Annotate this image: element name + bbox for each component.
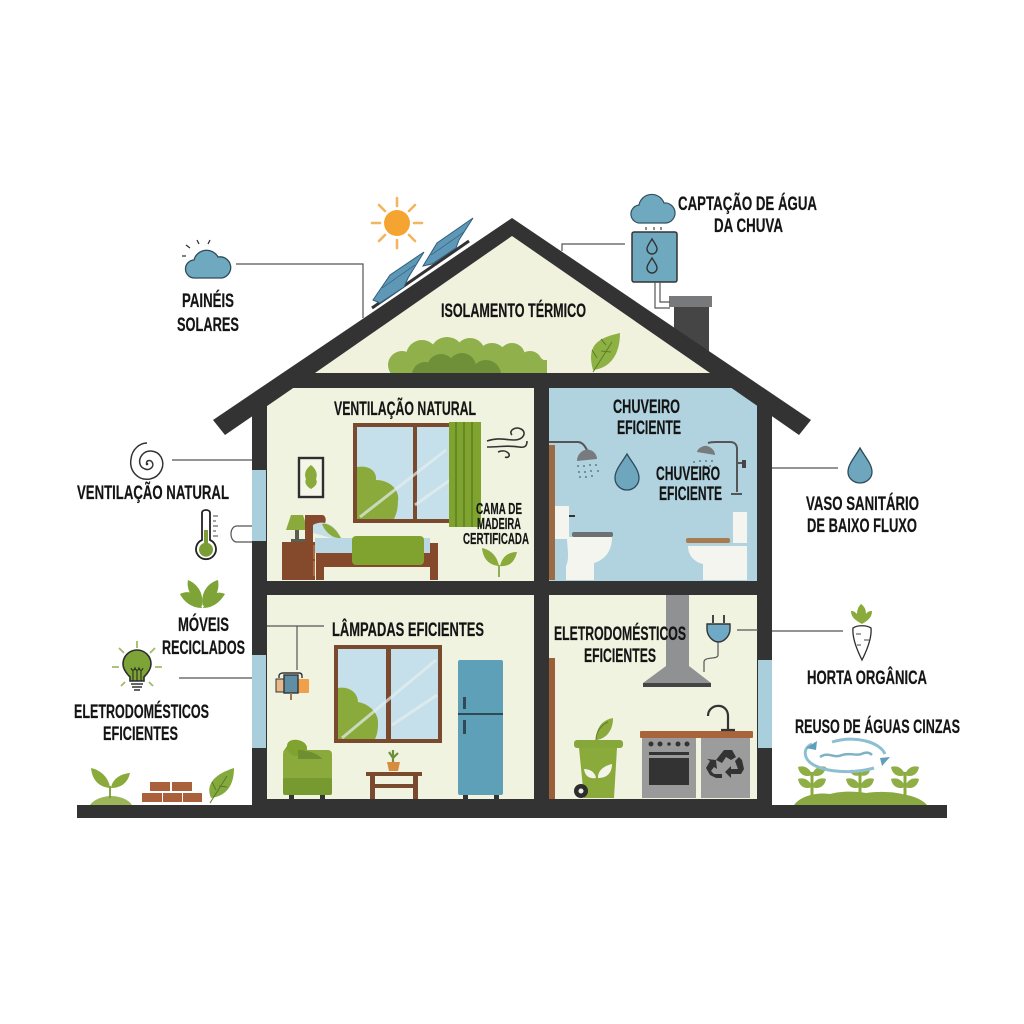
icon: cloud weather [182,240,231,278]
panel: kitchen [549,595,758,799]
icon: wind [487,428,527,457]
label: painéis solares [177,290,239,336]
heading: eletrodomésticos eficientes: ELETRODOMÉSTICOS [554,623,686,645]
leader: rain collection [562,244,625,251]
label: móveis reciclados: RECICLADOS [162,638,245,659]
leader: horta [772,630,843,632]
label: horta orgânica: HORTA ORGÂNICA [807,667,927,689]
label: captação de água: CAPTAÇÃO DE ÁGUA [678,193,817,215]
stove [642,738,696,798]
icon: light bulb [112,641,162,690]
middle floor [260,581,765,595]
heading: eletrodomésticos eficientes: EFICIENTES [584,646,656,667]
fridge [458,660,503,799]
attic floor beam [267,373,758,405]
label: cama de madeira certificada: CERTIFICADA [463,531,529,548]
label: ventilação natural: VENTILAÇÃO NATURAL [77,482,229,504]
icon: spiral air [131,443,163,479]
icon: attic leaf [591,333,620,372]
toilet left [555,506,613,580]
sustainable house infographic [74,192,960,818]
label: chuveiro eficiente: CHUVEIRO [656,464,720,485]
icon: water drop right [848,448,872,483]
label: chuveiro eficiente [656,464,722,505]
heading: chuveiro eficiente [613,397,681,439]
coffee table with plant [366,750,422,799]
icon: sun [372,198,422,248]
panel: living room [267,619,503,799]
icon: seedling left [90,768,132,805]
shower right [692,442,746,494]
house structure [77,218,947,818]
sofa [283,740,332,799]
label: vaso sanitário: DE BAIXO FLUXO [807,516,917,537]
label: cama de madeira certificada: CAMA DE [476,501,522,518]
icon: plug [704,615,730,672]
toilet right [686,512,747,580]
label: eletrodomésticos eficientes: EFICIENTES [103,724,178,745]
label: móveis reciclados [162,614,245,659]
heading: lâmpadas eficientes: LÂMPADAS EFICIENTES [332,619,484,641]
label: cama de madeira certificada [463,501,529,548]
leader: bulb [179,677,252,679]
wall window lower left [252,655,266,748]
room: bathroom background [549,388,757,581]
attic insulation bush [388,337,547,373]
leader: ventilação [172,459,252,461]
label: painéis solares: SOLARES [177,315,239,336]
roof [213,218,811,435]
label: chuveiro eficiente: EFICIENTE [659,484,722,505]
panel: bedroom [282,398,529,580]
heading: eletrodomésticos eficientes [554,623,686,667]
label: cama de madeira certificada: MADEIRA [477,516,521,533]
recycling cabinet [701,738,750,798]
wall window right [758,660,772,748]
label: eletrodomésticos eficientes: ELETRODOMÉSTICOS [74,701,209,723]
leader: vaso sanitário [772,467,838,469]
heading: chuveiro eficiente: EFICIENTE [617,418,681,439]
leader: thermometer [231,526,252,542]
compost bin [574,718,623,798]
room: living room background [267,595,534,799]
window [334,645,442,743]
picture frame [299,458,323,497]
window [353,423,450,523]
label: móveis reciclados: MÓVEIS [178,614,229,636]
wall window upper left [252,470,266,541]
icon: chimney [669,296,712,365]
icon: leaves [180,580,225,608]
icon: carrot [851,604,872,660]
icon: sprout [482,548,517,577]
icon: bricks [142,782,202,802]
right wall [757,405,772,805]
water drop [615,454,639,490]
label: captação de água [678,193,817,237]
brown strip [549,445,555,580]
left wall [252,405,267,805]
panel: bathroom [549,397,747,580]
leader: plug [737,629,758,631]
brown strip [549,658,555,799]
bed [305,515,438,580]
smart device [276,673,309,700]
attic [315,236,710,373]
room: kitchen background [549,595,758,799]
icon: water reuse cycle and plants [794,739,927,805]
curtain [449,422,481,527]
bottom floor [252,799,772,807]
centre wall [534,380,549,800]
leader: lamps inside [267,626,324,670]
room: bedroom background [267,388,534,581]
label: eletrodomésticos eficientes [74,701,209,745]
heading: chuveiro eficiente: CHUVEIRO [613,397,680,418]
label: captação de água: DA CHUVA [714,216,783,237]
icon: rain collection tank [631,194,677,308]
leader: solar panels [236,264,363,318]
heading: isolamento térmico: ISOLAMENTO TÉRMICO [441,300,586,322]
icon: solar panels [372,218,473,308]
label: painéis solares: PAINÉIS [182,290,234,312]
shower left [549,442,598,478]
ground line [77,805,947,818]
lamp [286,515,308,542]
label: vaso sanitário: VASO SANITÁRIO [806,493,919,515]
label: vaso sanitário [806,493,919,537]
heading: ventilação natural: VENTILAÇÃO NATURAL [334,398,476,420]
icon: thermometer [196,510,218,559]
faucet [708,706,735,730]
range hood [643,595,711,687]
icon: leaf bottom left [209,768,234,803]
counter [640,731,753,738]
nightstand [282,542,315,580]
